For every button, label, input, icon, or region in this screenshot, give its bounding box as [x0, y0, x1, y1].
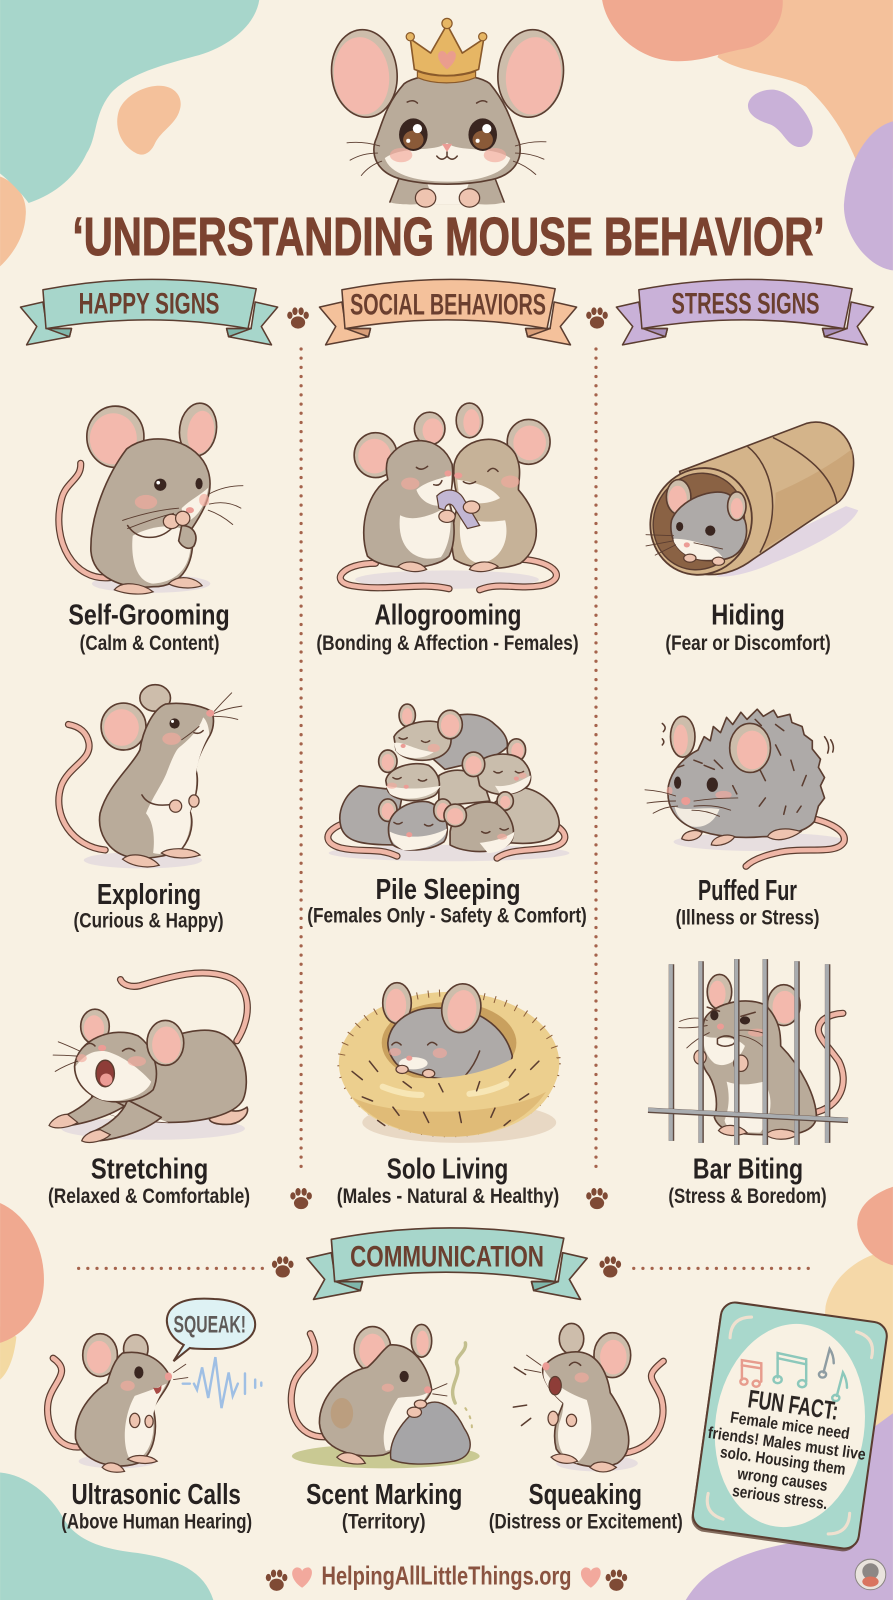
panel: puffed fur — [645, 709, 847, 929]
label: puffed fur — [676, 875, 819, 929]
icon: two mice grooming — [340, 403, 556, 590]
label: bar biting: (Stress & Boredom) — [668, 1184, 827, 1208]
label: allogrooming: (Bonding & Affection - Females) — [316, 631, 579, 655]
icon: stretching mouse — [49, 973, 248, 1142]
icon: calling mouse — [48, 1299, 261, 1472]
label: hiding: (Fear or Discomfort) — [665, 631, 831, 655]
panel: exploring — [59, 685, 242, 933]
label: solo living: Solo Living — [387, 1154, 508, 1186]
label: scent marking: Scent Marking — [306, 1479, 462, 1511]
label: scent marking: (Territory) — [342, 1510, 426, 1534]
panel: scent marking — [291, 1324, 480, 1534]
fun fact text: Female mice need — [729, 1409, 851, 1443]
fun fact text — [707, 1385, 867, 1513]
label: allogrooming: Allogrooming — [375, 599, 522, 631]
label: squeaking — [489, 1479, 683, 1534]
label: ultrasonic calls — [61, 1479, 252, 1534]
panel: self-grooming — [59, 401, 243, 655]
ribbon: stress signs: STRESS SIGNS — [672, 287, 819, 320]
panel: solo living — [337, 981, 559, 1208]
ribbon: happy signs — [20, 279, 278, 345]
speech bubble: SQUEAK! — [174, 1312, 246, 1339]
icon: grooming mouse — [59, 401, 243, 594]
panel: ultrasonic calls — [48, 1299, 261, 1534]
dotted column dividers — [301, 349, 596, 1173]
footer website line: HelpingAllLittleThings.org — [322, 1563, 572, 1591]
fun fact text: wrong causes — [735, 1465, 829, 1495]
label: pile sleeping — [307, 874, 587, 927]
label: exploring: (Curious & Happy) — [74, 909, 224, 933]
label: self-grooming: (Calm & Content) — [80, 631, 219, 655]
label: pile sleeping: (Females Only - Safety & Comfort) — [307, 903, 587, 927]
label: stretching — [48, 1154, 250, 1208]
icon: mouse pile — [328, 704, 569, 861]
label: puffed fur: Puffed Fur — [698, 875, 797, 907]
label: squeaking: (Distress or Excitement) — [489, 1510, 683, 1534]
speech bubble — [167, 1299, 255, 1361]
panel: squeaking — [489, 1323, 683, 1534]
ribbon: social behaviors: SOCIAL BEHAVIORS — [350, 288, 546, 321]
label: pile sleeping: Pile Sleeping — [376, 874, 520, 906]
label: ultrasonic calls: Ultrasonic Calls — [72, 1479, 241, 1511]
icon: mouse behind bars — [648, 959, 848, 1145]
label: stretching: (Relaxed & Comfortable) — [48, 1184, 250, 1208]
label: scent marking — [306, 1479, 462, 1534]
fun fact text: friends! Males must live — [707, 1424, 867, 1464]
panel: pile sleeping — [307, 704, 587, 927]
header mouse with crown — [327, 18, 568, 207]
label: hiding — [665, 599, 831, 655]
label: self-grooming — [68, 599, 230, 655]
panel: hiding — [633, 422, 858, 655]
communication heading row — [79, 1228, 816, 1299]
fun fact text: solo. Housing them — [719, 1443, 847, 1479]
label: hiding: Hiding — [711, 599, 785, 631]
icon: music notes — [740, 1349, 847, 1401]
label: ultrasonic calls: (Above Human Hearing) — [61, 1510, 252, 1534]
icon: exploring mouse — [59, 685, 242, 868]
communication heading row: COMMUNICATION — [350, 1240, 544, 1273]
label: stretching: Stretching — [91, 1154, 208, 1186]
label: self-grooming: Self-Grooming — [68, 599, 230, 631]
icon: mouse in nest — [339, 981, 559, 1143]
label: exploring: Exploring — [97, 879, 201, 911]
panel: stretching — [48, 973, 250, 1208]
paw icons — [287, 307, 608, 1209]
label: solo living — [337, 1154, 559, 1208]
label: bar biting: Bar Biting — [693, 1154, 803, 1186]
label: exploring — [74, 879, 224, 933]
fun fact text: serious stress. — [731, 1482, 829, 1513]
callout: fun fact card — [690, 1301, 889, 1553]
ribbon: social behaviors — [319, 279, 577, 345]
icon: scent marking mouse — [291, 1324, 480, 1468]
icon: puffed mouse — [645, 709, 847, 866]
ribbon: happy signs: HAPPY SIGNS — [79, 287, 219, 320]
icon: mouse in tube — [633, 422, 858, 592]
label: puffed fur: (Illness or Stress) — [676, 905, 819, 929]
panel: bar biting — [648, 959, 848, 1208]
icon: small logo badge — [855, 1559, 886, 1590]
label: solo living: (Males - Natural & Healthy) — [337, 1184, 559, 1208]
label: bar biting — [668, 1154, 827, 1208]
label: allogrooming — [316, 599, 579, 655]
panel: allogrooming — [316, 403, 579, 655]
label: squeaking: Squeaking — [529, 1479, 642, 1511]
icon: squeaking mouse — [513, 1323, 663, 1472]
fun fact text: FUN FACT: — [746, 1385, 840, 1426]
ribbon: stress signs — [616, 279, 874, 345]
